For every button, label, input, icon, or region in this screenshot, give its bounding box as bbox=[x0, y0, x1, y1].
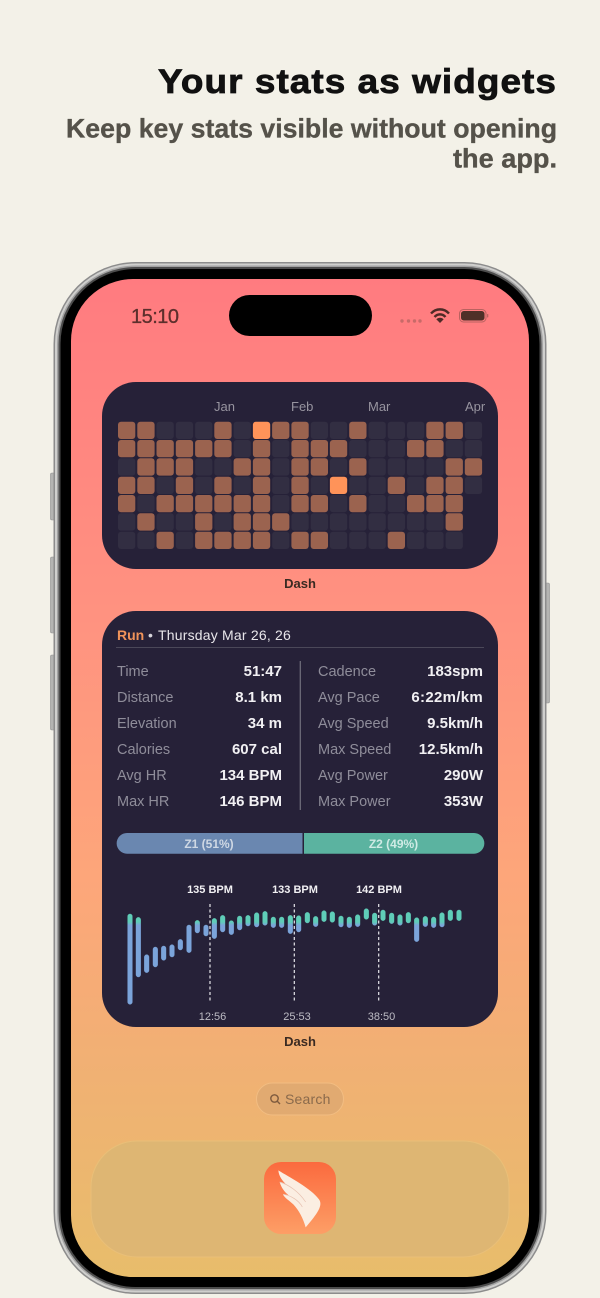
left stats column: Calories bbox=[117, 742, 170, 758]
left stats column: 51:47 bbox=[244, 663, 282, 680]
right stats column: 183spm bbox=[427, 663, 483, 680]
zone bar: Z2 (49%) bbox=[369, 837, 418, 851]
month labels: Apr bbox=[465, 399, 486, 414]
left stats column: Elevation bbox=[117, 716, 177, 732]
left stats column: Avg HR bbox=[117, 768, 167, 784]
left stats column: Max HR bbox=[117, 794, 169, 810]
time labels bbox=[199, 1011, 395, 1023]
zone bar bbox=[117, 833, 484, 854]
right stats column: Avg Power bbox=[318, 768, 388, 784]
time labels: 12:56 bbox=[199, 1011, 226, 1023]
right stats column: 12.5km/h bbox=[419, 741, 483, 758]
subtitle bbox=[66, 114, 557, 174]
widget header bbox=[116, 627, 484, 648]
signal dots bbox=[400, 319, 422, 323]
month labels: Feb bbox=[291, 399, 313, 414]
right stats column bbox=[318, 663, 484, 810]
left stats column: 8.1 km bbox=[235, 689, 282, 706]
peak labels: 133 BPM bbox=[272, 884, 318, 896]
left stats column: 134 BPM bbox=[219, 767, 282, 784]
metal bezel bbox=[54, 262, 546, 1294]
dock bbox=[91, 1141, 509, 1257]
icon: battery bbox=[460, 310, 488, 322]
icon: magnifier bbox=[271, 1095, 280, 1104]
peak labels bbox=[187, 884, 402, 896]
panel: run summary widget bbox=[102, 611, 498, 1027]
widget caption: Dash bbox=[284, 576, 316, 591]
right stats column: 6:22m/km bbox=[411, 689, 483, 706]
phone frame bbox=[50, 262, 550, 1294]
left stats column: Time bbox=[117, 664, 149, 680]
peak labels: 135 BPM bbox=[187, 884, 233, 896]
heart rate chart bbox=[128, 884, 461, 1023]
month labels bbox=[214, 399, 486, 414]
right stats column: 290W bbox=[444, 767, 484, 784]
title: Your stats as widgets bbox=[158, 63, 557, 101]
heart rate bars bbox=[128, 909, 461, 1004]
panel: calendar heatmap widget bbox=[102, 382, 498, 569]
left stats column bbox=[117, 663, 282, 810]
right stats column: 9.5km/h bbox=[427, 715, 483, 732]
subtitle: Keep key stats visible without opening bbox=[66, 114, 557, 144]
left stats column: Distance bbox=[117, 690, 173, 706]
right stats column: Avg Pace bbox=[318, 690, 380, 706]
right stats column: Max Speed bbox=[318, 742, 391, 758]
right stats column: 353W bbox=[444, 793, 484, 810]
widget header: • bbox=[148, 627, 153, 643]
widget header: Run bbox=[117, 627, 144, 643]
icon: wifi bbox=[431, 309, 449, 323]
time labels: 38:50 bbox=[368, 1011, 395, 1023]
dynamic island bbox=[229, 295, 372, 336]
left stats column: 34 m bbox=[248, 715, 282, 732]
right stats column: Avg Speed bbox=[318, 716, 389, 732]
time labels: 25:53 bbox=[283, 1011, 311, 1023]
right stats column: Cadence bbox=[318, 664, 376, 680]
clock: 15:10 bbox=[131, 306, 179, 328]
heatmap grid bbox=[118, 422, 482, 549]
widget caption: Dash bbox=[284, 1034, 316, 1049]
dashed markers bbox=[210, 904, 379, 1003]
side buttons bbox=[50, 473, 550, 730]
status bar bbox=[131, 295, 488, 336]
left stats column: 607 cal bbox=[232, 741, 282, 758]
screen bbox=[71, 279, 529, 1277]
widget header: Thursday Mar 26, 26 bbox=[158, 627, 291, 643]
zone bar: Z1 (51%) bbox=[184, 837, 234, 851]
subtitle: the app. bbox=[453, 144, 557, 174]
icon: app wing bbox=[264, 1162, 336, 1234]
peak labels: 142 BPM bbox=[356, 884, 402, 896]
right stats column: Max Power bbox=[318, 794, 391, 810]
search pill: Search bbox=[285, 1091, 331, 1107]
left stats column: 146 BPM bbox=[219, 793, 282, 810]
month labels: Mar bbox=[368, 399, 391, 414]
search pill bbox=[256, 1083, 344, 1115]
month labels: Jan bbox=[214, 399, 235, 414]
